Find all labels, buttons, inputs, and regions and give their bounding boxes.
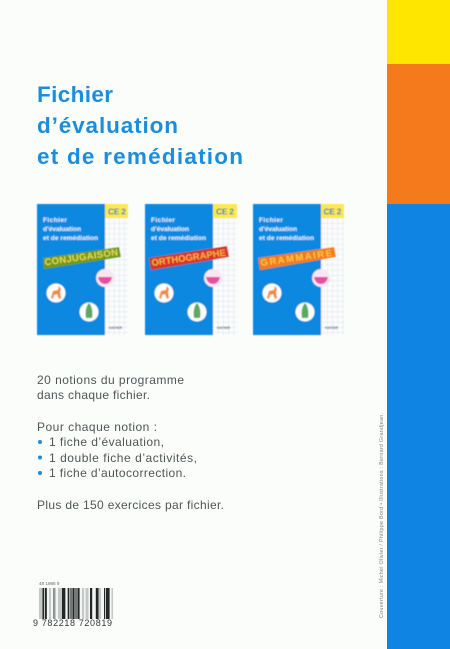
body text: Pour chaque notion : (37, 420, 157, 434)
cover: orthographe (145, 204, 237, 335)
cover title: Fichier (151, 217, 175, 224)
title: d’évaluation (37, 113, 178, 138)
icon: plant (188, 302, 206, 322)
icon: bowl (204, 269, 222, 287)
icon: plant (296, 302, 314, 322)
body text: dans chaque fichier. (37, 388, 150, 402)
cover title: et de remédiation (151, 235, 206, 242)
body text: 20 notions du programme (37, 373, 184, 387)
icon: animal (46, 284, 66, 302)
barcode: 48 1986 9 (39, 581, 60, 586)
publisher logo: HATIER (325, 326, 339, 330)
icon: animal (154, 284, 174, 302)
banner: grammaire: GRAMMAIRE (260, 248, 333, 269)
publisher logo: HATIER (217, 326, 231, 330)
cover title (151, 217, 206, 242)
cover title: d’évaluation (259, 226, 297, 233)
vertical credits: Couverture : Michel Olivier / Philippe Bord • Illustrations : Bernard Grandjean. (379, 413, 385, 618)
cover title (259, 217, 314, 242)
cover label: CE 2: CE 2 (324, 206, 342, 216)
side colour bands (387, 0, 450, 649)
title: Fichier (37, 82, 113, 107)
bullet list: 1 fiche d’évaluation, (49, 435, 164, 449)
cover title: et de remédiation (43, 235, 98, 242)
barcode: 9 782218 720819 (33, 618, 112, 628)
cover title: d’évaluation (43, 226, 81, 233)
cover: grammaire (253, 204, 344, 335)
icon: bowl (312, 269, 330, 287)
cover: conjugaison (37, 204, 128, 335)
banner: orthographe: ORTHOGRAPHE (151, 248, 227, 269)
icon: animal (262, 284, 282, 302)
cover title (43, 217, 98, 242)
cover title: et de remédiation (259, 235, 314, 242)
bullet list (38, 435, 197, 480)
bullet list: 1 fiche d’autocorrection. (49, 466, 186, 480)
cover title: Fichier (259, 217, 283, 224)
body text: Plus de 150 exercices par fichier. (37, 498, 224, 512)
title (37, 82, 243, 169)
banner: conjugaison: CONJUGAISON (44, 247, 119, 268)
body text (37, 373, 224, 512)
bullet list: 1 double fiche d’activités, (49, 451, 197, 465)
cover label: CE 2: CE 2 (216, 206, 234, 216)
icon: plant (80, 302, 98, 322)
publisher logo: HATIER (109, 326, 123, 330)
cover title: d’évaluation (151, 226, 189, 233)
title: et de remédiation (37, 144, 243, 169)
icon: bowl (96, 269, 114, 287)
cover title: Fichier (43, 217, 67, 224)
barcode (33, 581, 113, 628)
cover label: CE 2: CE 2 (108, 206, 126, 216)
